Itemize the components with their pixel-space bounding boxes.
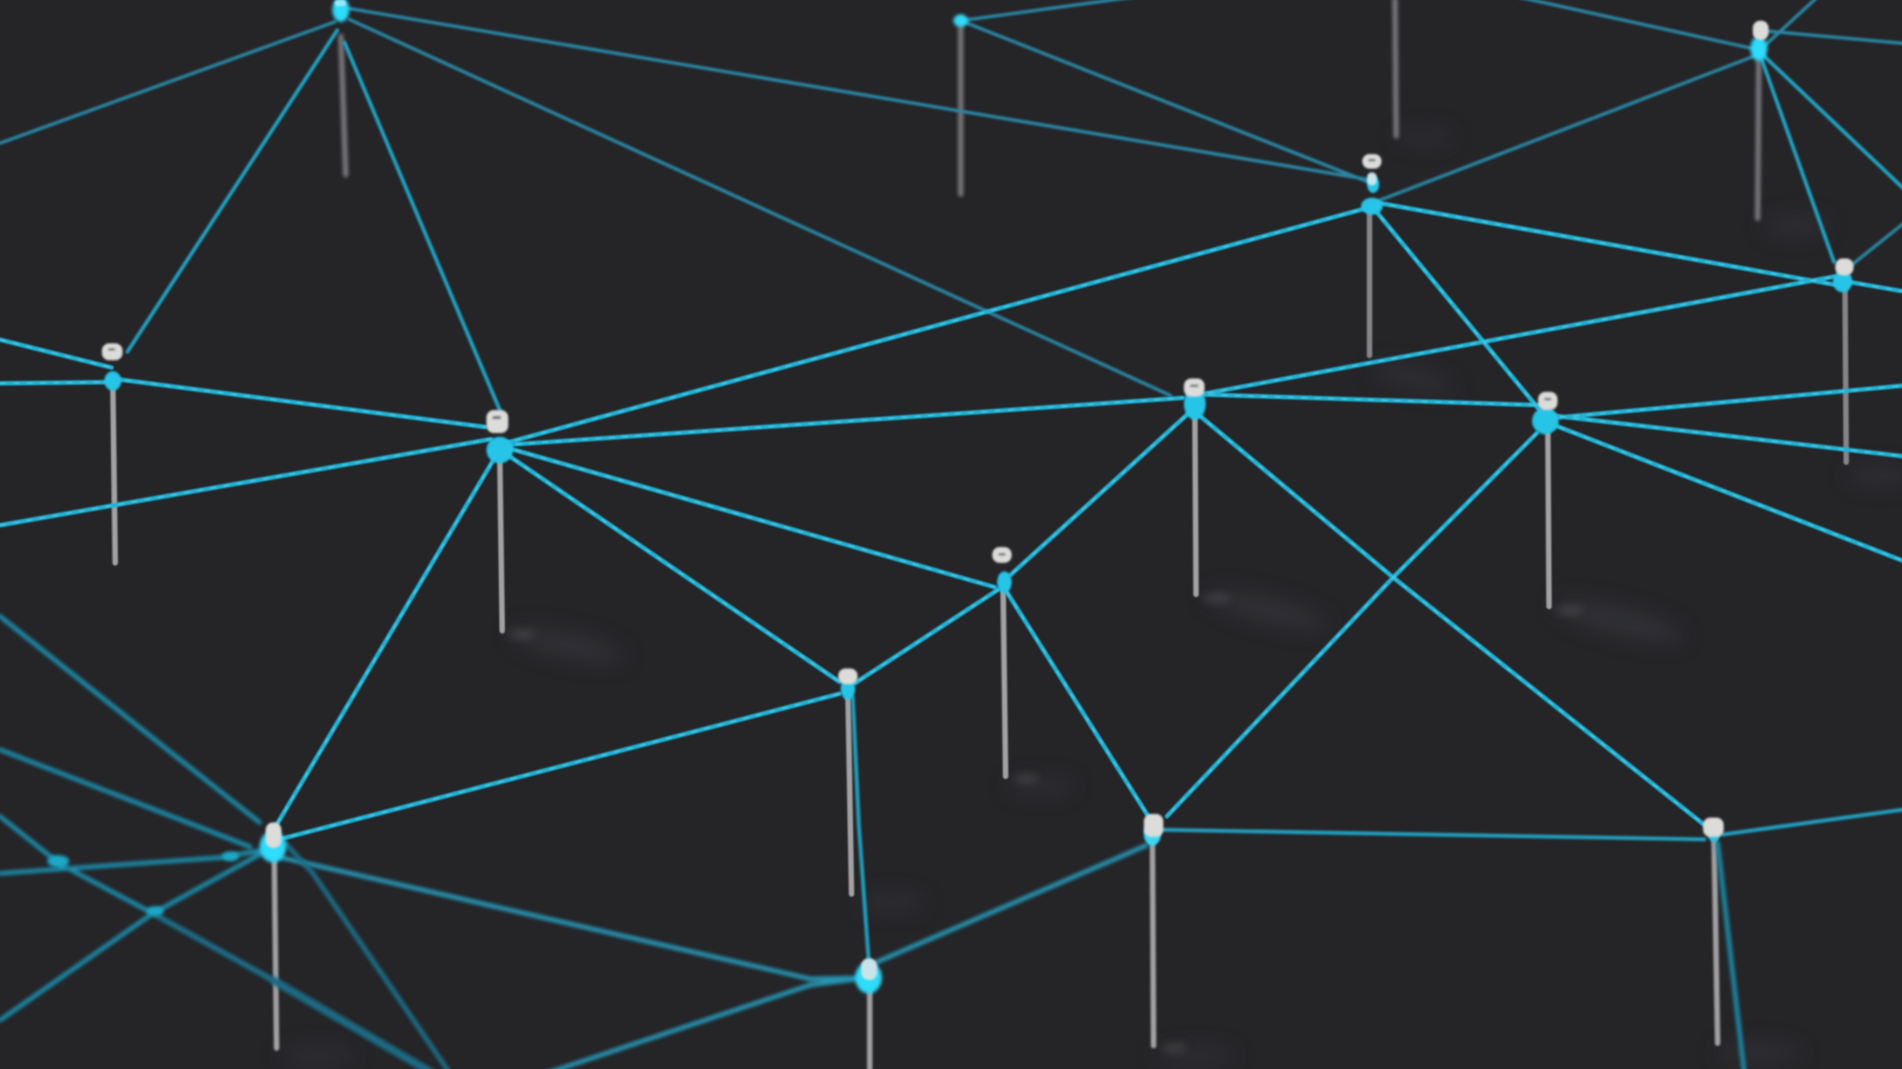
head dents bbox=[108, 159, 1551, 556]
strings: near, blurred bbox=[853, 697, 1902, 958]
strings: far, blurred bbox=[0, 0, 1902, 395]
pin shadows bbox=[279, 131, 1902, 1063]
string twist highlights bbox=[0, 203, 1902, 839]
heads: blurred bbox=[266, 0, 1769, 980]
strings: upper, brighter bbox=[127, 30, 1902, 410]
strings: middle, sharp bbox=[0, 203, 1902, 839]
heads: sharp bbox=[102, 154, 1853, 684]
strings: lower, soft and thicker bbox=[277, 845, 1146, 1069]
pins: middle row bbox=[113, 212, 1846, 894]
pins: near row bbox=[274, 837, 1718, 1069]
strings: foreground, most blurred bbox=[0, 616, 1744, 1069]
knots: sharp bbox=[104, 176, 1852, 845]
pin base glints bbox=[507, 594, 1584, 1052]
pins: far row bbox=[341, 0, 1759, 218]
